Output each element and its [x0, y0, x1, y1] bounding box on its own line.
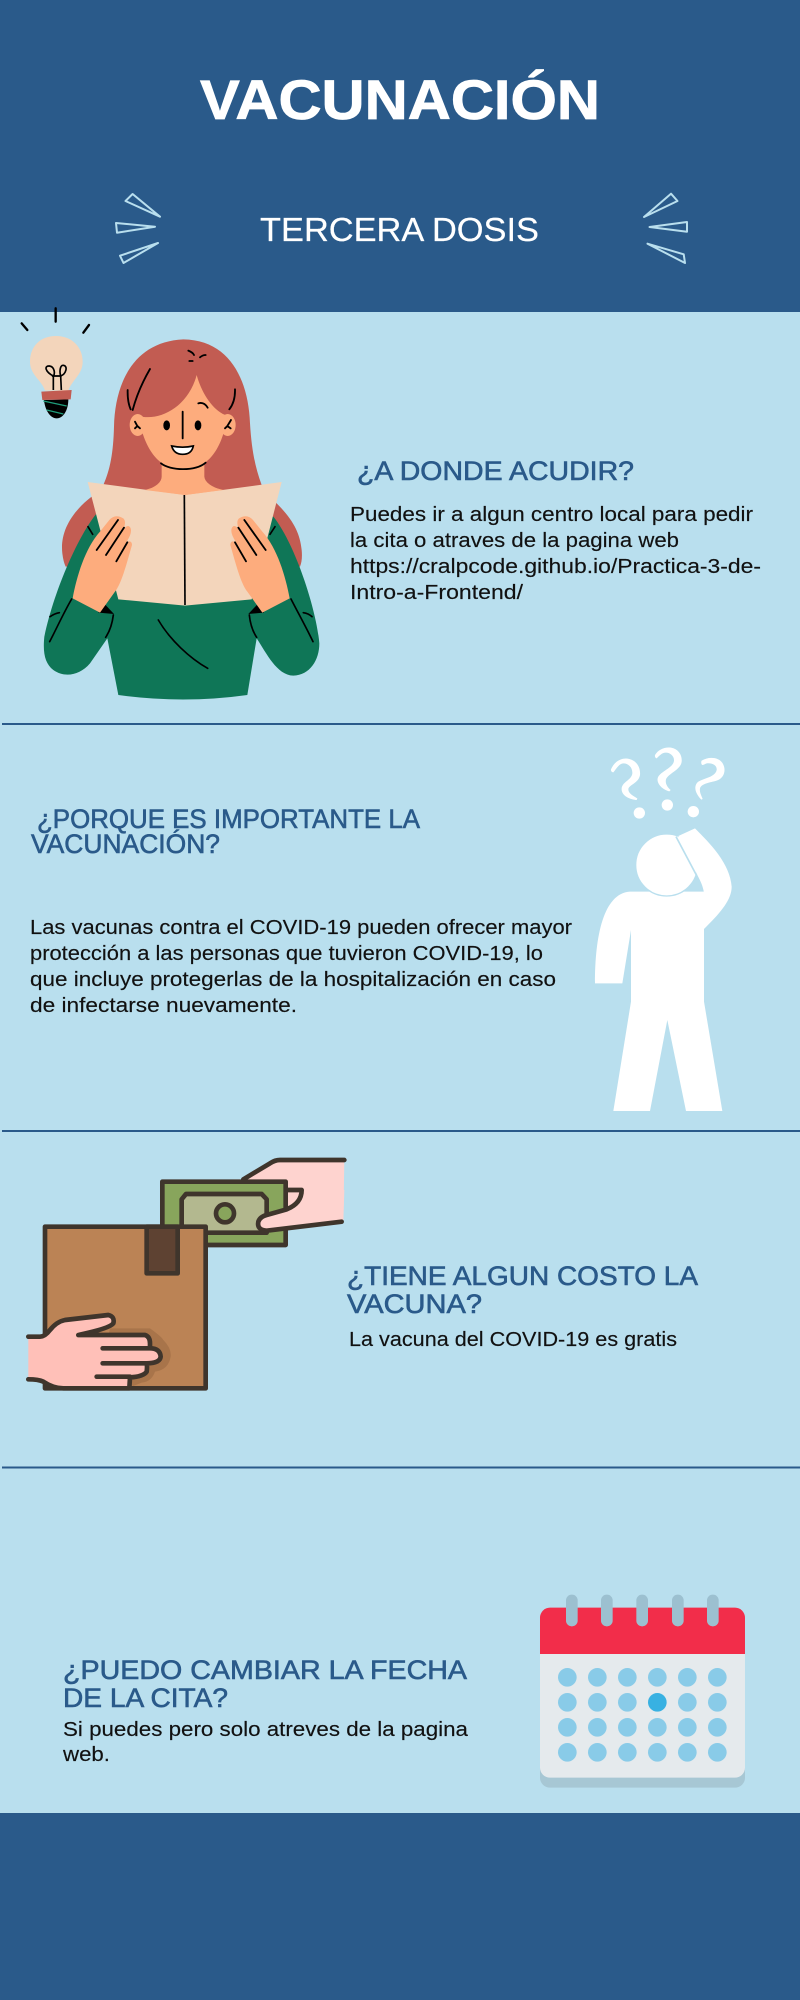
facial details — [128, 351, 235, 469]
text block: cambiar fecha: Si puedes pero solo atreves de la pagina — [63, 1718, 469, 1741]
ears — [130, 414, 146, 436]
illustration: confused person with question marks — [595, 747, 732, 1111]
text block: porque es importante: Las vacunas contra el COVID-19 pueden ofrecer mayor — [30, 916, 572, 939]
face — [138, 375, 227, 470]
text block: a donde acudir — [350, 503, 761, 604]
question marks — [611, 747, 725, 819]
illustration: lightbulb — [22, 308, 89, 418]
neck — [145, 457, 223, 500]
illustration: box and money exchange — [28, 1160, 344, 1388]
left hand — [73, 516, 132, 614]
icon: right sparkles — [644, 194, 687, 263]
banknote — [162, 1182, 286, 1245]
text block: porque es importante: de infectarse nuevamente. — [30, 994, 297, 1017]
heading: costo: VACUNA? — [347, 1289, 482, 1319]
heading: costo: ¿TIENE ALGUN COSTO LA — [347, 1261, 698, 1291]
heading: cambiar fecha: ¿PUEDO CAMBIAR LA FECHA — [63, 1655, 467, 1685]
neck peek — [145, 485, 223, 495]
paper — [88, 482, 282, 606]
green sweater — [44, 513, 319, 699]
text block: a donde acudir: la cita o atraves de la pagina web — [350, 529, 679, 552]
heading: a donde acudir: ¿A DONDE ACUDIR? — [357, 456, 634, 486]
icon: left sparkles — [116, 194, 160, 263]
text block: cambiar fecha — [62, 1718, 469, 1766]
heading: porque es importante: VACUNACIÓN? — [31, 829, 220, 859]
text block: porque es importante — [30, 916, 572, 1017]
text block: porque es importante: que incluye protegerlas de la hospitalización en caso — [30, 968, 556, 991]
fingers over banknote — [258, 1190, 344, 1231]
hand shadow — [100, 1328, 171, 1386]
heading: porque es importante: ¿PORQUE ES IMPORTANTE LA — [37, 804, 420, 834]
right hand — [230, 516, 290, 614]
heading: cambiar fecha — [63, 1655, 467, 1713]
cardboard box — [45, 1227, 206, 1388]
text block: a donde acudir: https://cralpcode.github.io/Practica-3-de- — [350, 555, 761, 578]
text block: cambiar fecha: web. — [62, 1743, 110, 1766]
text block: porque es importante: protección a las personas que tuvieron COVID-19, lo — [30, 942, 543, 965]
text block: costo: La vacuna del COVID-19 es gratis — [349, 1328, 677, 1351]
heading: costo — [347, 1261, 698, 1319]
hair — [62, 339, 302, 567]
body — [595, 892, 722, 1111]
heading: cambiar fecha: DE LA CITA? — [63, 1683, 228, 1713]
panel: header band — [0, 0, 800, 312]
title: VACUNACIÓN — [200, 68, 600, 131]
head — [636, 834, 698, 896]
raised arm — [678, 828, 732, 929]
panel: footer band — [0, 1813, 800, 2000]
heading: porque es importante — [31, 804, 420, 859]
illustration: woman reading a paper — [44, 339, 319, 699]
text block: a donde acudir: Intro-a-Frontend/ — [350, 581, 523, 604]
illustration: calendar — [540, 1595, 745, 1788]
subtitle: TERCERA DOSIS — [260, 211, 539, 248]
lower hand — [28, 1315, 161, 1388]
text block: a donde acudir: Puedes ir a algun centro local para pedir — [350, 503, 753, 526]
sweater lines — [50, 527, 313, 668]
upper hand back — [233, 1160, 344, 1231]
